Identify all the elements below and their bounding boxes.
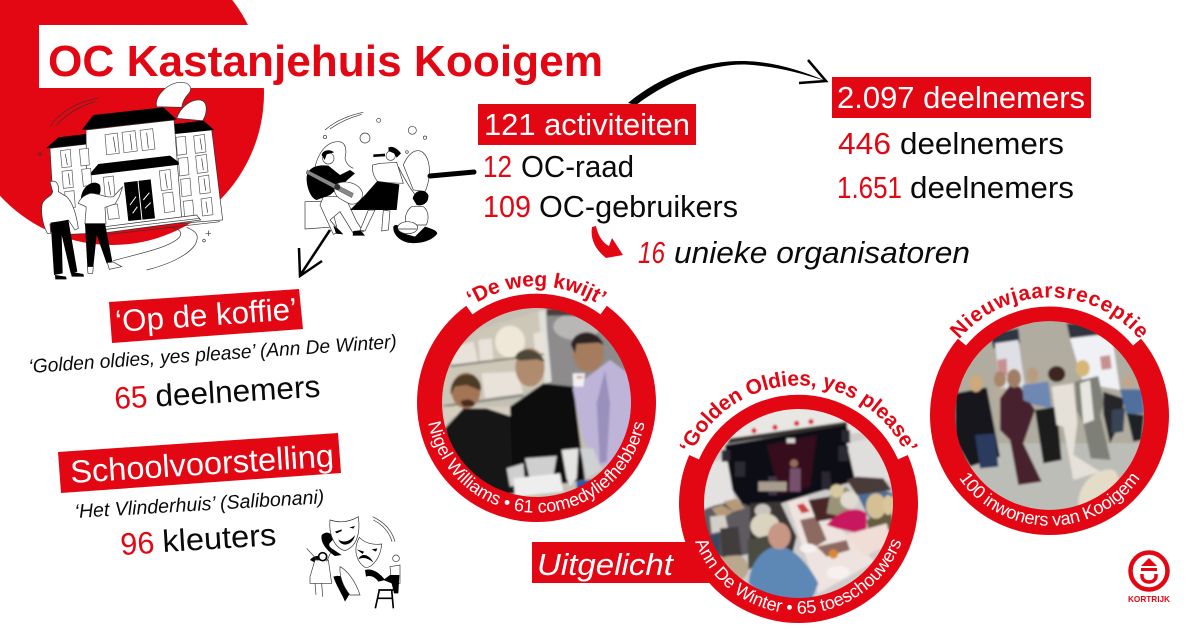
background red circle: [0, 0, 264, 245]
caption on arc: Ann De Winter • 65 toeschouwers: [695, 540, 901, 614]
photo circle: De weg kwijt: [417, 272, 656, 522]
woman: [81, 183, 101, 203]
illustration: theatre masks: [307, 517, 400, 608]
participants block: deelnemers: [910, 170, 1074, 205]
unique organisers: 16: [638, 235, 666, 270]
block: Op de koffie: ‘Golden oldies, yes please’ (Ann De Winter): [28, 331, 397, 378]
man: [42, 181, 78, 233]
photo circle: Nieuwjaarsreceptie: [930, 286, 1169, 535]
participants block: 2.097 deelnemers: [837, 80, 1085, 115]
singer: [372, 162, 403, 183]
participants block: [832, 77, 1091, 205]
unique organisers: unieke organisatoren: [674, 235, 970, 270]
notch for heading: [682, 377, 914, 452]
block: Schoolvoorstelling: kleuters: [161, 517, 277, 559]
heading on arc: ‘Golden Oldies, yes please’: [680, 371, 918, 449]
Uitgelicht label: Uitgelicht: [537, 547, 674, 582]
block: Schoolvoorstelling: Schoolvoorstelling: [69, 437, 335, 490]
activities block: 109: [483, 189, 531, 224]
photo: standing crowd: [955, 321, 1144, 510]
activities block: 12: [483, 149, 512, 184]
caption on arc: 100 inwoners van Kooigem: [960, 473, 1140, 526]
Uitgelicht label: [532, 542, 732, 583]
activities block: OC-gebruikers: [539, 189, 738, 224]
participants block: 1.651: [837, 170, 902, 205]
block: Op de koffie: 65: [113, 379, 148, 416]
notch for heading: [952, 289, 1147, 334]
photo: audience at long table: [704, 409, 893, 598]
block: Op de koffie: [28, 289, 397, 416]
curved arrow to participants: [628, 60, 826, 105]
participants block: 446: [838, 126, 891, 161]
photo circle: Golden Oldies: [679, 371, 918, 623]
logo: Kortrijk: KORTRIJK: [1128, 594, 1171, 604]
activities block: [478, 104, 738, 224]
red arrow to organisers: [592, 226, 623, 258]
notch for heading: [462, 276, 611, 300]
block: Schoolvoorstelling: [58, 433, 341, 562]
guitarist: [305, 201, 337, 229]
photo: three men with glasses: [442, 308, 631, 497]
activities block: OC-raad: [521, 149, 634, 184]
block: Schoolvoorstelling: ‘Het Vlinderhuis’ (Salibonani): [74, 486, 325, 523]
arrow: musicians to 'Op de koffie': [299, 230, 330, 276]
connector stroke to activities: [430, 172, 474, 176]
drummer: [405, 207, 428, 225]
illustration: musicians: [305, 112, 437, 243]
title: OC Kastanjehuis Kooigem: [48, 37, 603, 86]
block: Op de koffie: deelnemers: [154, 369, 321, 413]
participants block: deelnemers: [900, 126, 1064, 161]
activities block: 121 activiteiten: [484, 107, 690, 142]
logo: Kortrijk: [1128, 552, 1171, 604]
block: Op de koffie: ‘Op de koffie’: [114, 291, 298, 339]
block: Schoolvoorstelling: 96: [119, 525, 155, 562]
heading on arc: ‘De weg kwijt’: [466, 272, 607, 302]
illustration: cultural centre building with two people: [39, 82, 223, 279]
caption on arc: Nigel Williams • 61 comedyliefhebbers: [428, 421, 644, 513]
heading on arc: Nieuwjaarsreceptie: [950, 286, 1146, 338]
